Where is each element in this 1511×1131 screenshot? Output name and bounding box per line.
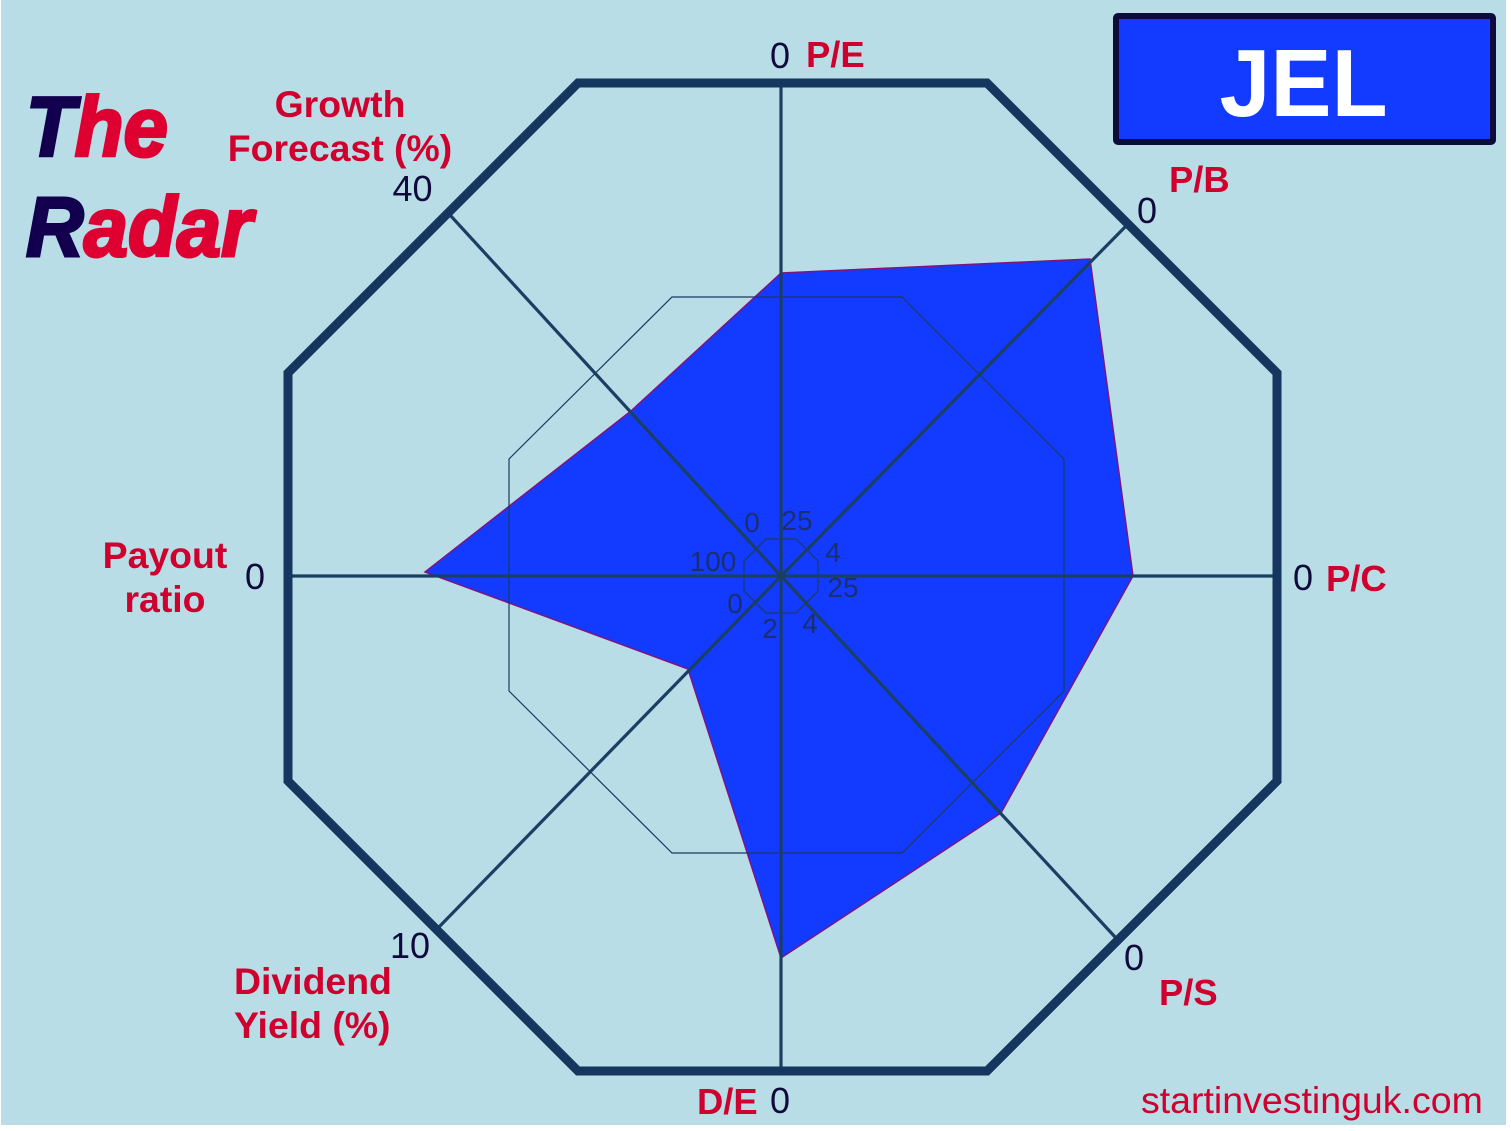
axis label: P/B: P/B	[1169, 159, 1230, 200]
ticker label: JEL	[1219, 29, 1388, 136]
axis label: P/C: P/C	[1326, 558, 1387, 599]
axis label: P/S: P/S	[1159, 972, 1218, 1013]
inner axis values: 0	[744, 507, 760, 538]
inner axis values: 100	[690, 546, 736, 577]
axis label: Payout ratio: Payout	[103, 534, 227, 576]
axis value: P/B outer: 0	[1137, 190, 1157, 231]
inner axis values: 25	[781, 505, 813, 536]
axis value: P/E outer: 0	[770, 35, 790, 76]
radar axes	[288, 83, 1277, 1071]
radar chart	[288, 83, 1277, 1071]
axis label: P/E: P/E	[806, 34, 865, 75]
data polygon	[425, 259, 1133, 958]
axis value: P/C outer: 0	[1293, 557, 1313, 598]
middle reference octagon	[509, 297, 1064, 853]
axis label: D/E: D/E	[697, 1081, 758, 1122]
inner axis values: 4	[802, 608, 818, 639]
ticker box	[1116, 16, 1493, 142]
axis label: Payout ratio: ratio	[124, 578, 206, 620]
axis value: Payout ratio outer: 0	[245, 556, 265, 597]
ticker box background	[1116, 16, 1493, 142]
axis value: Dividend Yield outer: 10	[390, 925, 430, 966]
axis label: Growth Forecast: Growth	[275, 83, 405, 125]
inner axis values: 25	[827, 572, 859, 603]
axis label: Dividend Yield: Dividend	[234, 960, 392, 1002]
inner reference octagon	[744, 539, 818, 613]
axis value: Growth Forecast outer: 40	[392, 168, 433, 209]
title word: Radar: Radar	[26, 181, 256, 274]
chart title	[26, 81, 256, 274]
axis value: P/S outer: 0	[1124, 937, 1144, 978]
axis value: D/E outer: 0	[770, 1080, 790, 1121]
inner axis values: 2	[762, 613, 778, 644]
inner axis values	[690, 505, 859, 644]
axis label: Growth Forecast: Forecast (%)	[228, 127, 452, 169]
website credit: startinvestinguk.com	[1141, 1079, 1483, 1121]
axis label: Dividend Yield: Yield (%)	[234, 1004, 390, 1046]
inner axis values: 0	[727, 588, 743, 619]
inner axis values: 4	[825, 537, 841, 568]
outer octagon frame	[288, 83, 1277, 1071]
title word: The: The	[26, 81, 168, 174]
